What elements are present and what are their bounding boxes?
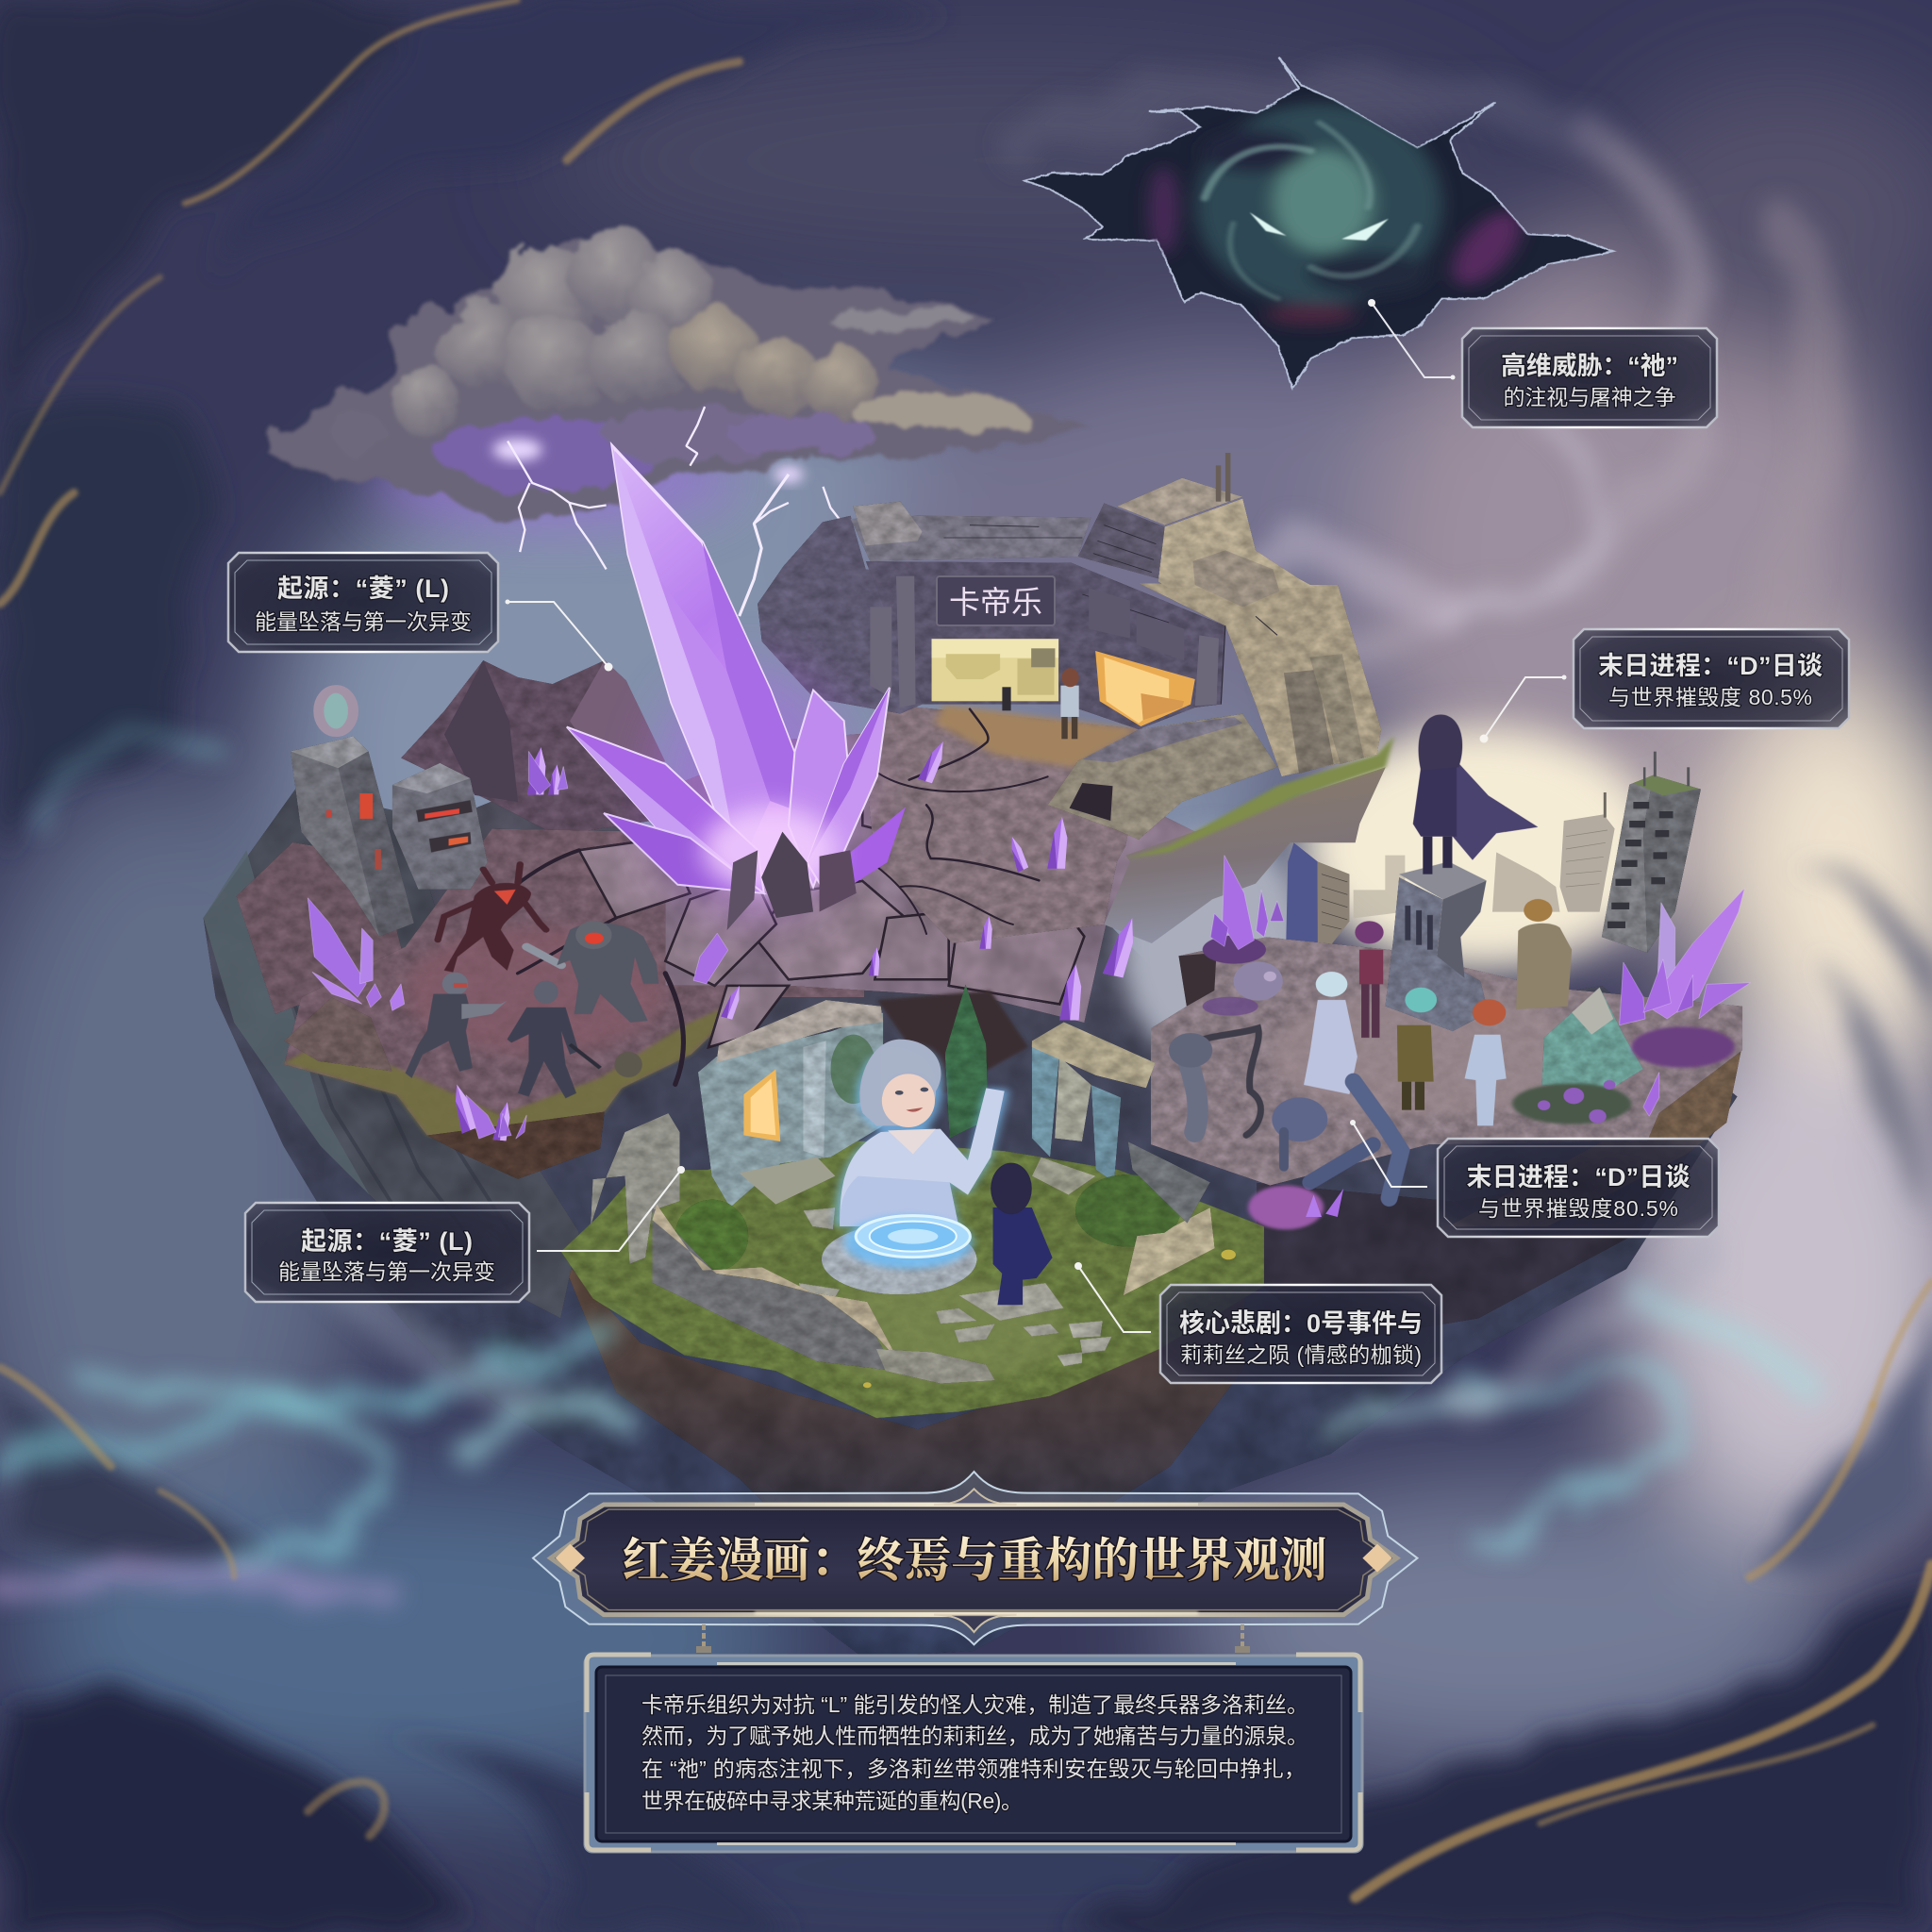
dimensional rift with eyes — [1024, 57, 1614, 389]
right mech tower — [392, 763, 488, 890]
crystal sphere — [1234, 961, 1283, 1001]
callout: doomsday progress upper: 与世界摧毁度 80.5% — [1608, 685, 1812, 709]
hologram woman — [835, 1040, 1009, 1226]
pedestal — [1385, 861, 1489, 1031]
tall crystals — [308, 751, 728, 1139]
white-dressed survivor — [1304, 1000, 1357, 1094]
dark-haired girl — [991, 1163, 1053, 1305]
callout: doomsday progress upper — [1479, 629, 1849, 743]
silver corner brackets — [587, 1655, 1360, 1850]
monster — [438, 864, 546, 972]
callout: doomsday progress lower: 末日进程：“D”日谈 — [1466, 1163, 1690, 1191]
leader line — [1074, 1262, 1151, 1332]
purple flower patches — [1203, 936, 1735, 1124]
garden island surface — [561, 1139, 1264, 1418]
storm cloud — [265, 226, 1091, 527]
callout: higher-dimensional threat: 的注视与屠神之争 — [1504, 385, 1675, 409]
leader line — [1368, 299, 1455, 379]
left mech tower — [291, 736, 414, 937]
callout: origin upper: 能量坠落与第一次异变 — [255, 609, 472, 634]
crumbled walls and bushes — [591, 1113, 1236, 1388]
bunker hill moss and cliff — [866, 705, 1394, 943]
callout: origin lower — [245, 1166, 685, 1302]
scattered purple crystals on plateau — [444, 738, 1138, 1141]
red-haired survivor — [1465, 999, 1507, 1125]
title plaque — [533, 1472, 1417, 1644]
leader line — [1479, 675, 1566, 743]
dark gap between plateau and garden — [877, 991, 1028, 1094]
description panel: 世界在破碎中寻求某种荒诞的重构(Re)。 — [641, 1789, 1023, 1813]
title plaque: 红姜漫画：终焉与重构的世界观测 — [623, 1534, 1326, 1587]
glowing doorway — [1095, 651, 1195, 726]
lit laboratory window — [932, 639, 1058, 701]
mist in front of underside — [295, 1232, 1700, 1454]
callout: doomsday progress upper: 末日进程：“D”日谈 — [1598, 652, 1823, 680]
giant energy crystal — [567, 446, 906, 930]
purple crystal flower bush — [1248, 1186, 1343, 1229]
sign plate — [937, 576, 1055, 625]
callout: core tragedy — [1074, 1262, 1441, 1383]
leader line — [537, 1166, 685, 1251]
hanging chains — [696, 1624, 1250, 1653]
callout: higher-dimensional threat: 高维威胁：“祂” — [1501, 352, 1678, 380]
left stone arch with lit doorway — [698, 1000, 883, 1208]
right island figures and crystals — [1169, 714, 1751, 1198]
maroon survivor — [1355, 921, 1384, 1038]
scientist at door — [1002, 668, 1079, 739]
callout: core tragedy: 核心悲剧：0号事件与 — [1179, 1309, 1423, 1338]
soldier one — [406, 973, 508, 1078]
callout: origin upper: 起源：“菱” (L) — [277, 575, 449, 603]
plateau surface, left: battlefield — [237, 829, 864, 1179]
floating island underside — [204, 801, 1738, 1657]
callout: doomsday progress lower — [1350, 1120, 1719, 1237]
description panel: 然而，为了赋予她人性而牺牲的莉莉丝，成为了她痛苦与力量的源泉。 — [641, 1724, 1308, 1748]
battlefield: mech towers, monster, soldiers — [291, 689, 728, 1139]
broken mecha wreck — [1169, 1028, 1401, 1198]
plateau surface, middle: cracked slabs — [492, 715, 1232, 1084]
right crystals — [1210, 856, 1751, 1116]
statue — [1516, 899, 1572, 1009]
mist gap beneath plateau — [1122, 832, 1306, 1066]
plateau cliff — [204, 789, 579, 1319]
mountains — [401, 660, 687, 836]
stone bunker: Cadilla base — [758, 453, 1381, 840]
teal-haired survivor — [1397, 988, 1437, 1110]
soldier two — [508, 981, 600, 1098]
glowing portal platform — [822, 1215, 977, 1294]
description panel: 卡帝乐组织为对抗 “L” 能引发的怪人灾难，制造了最终兵器多洛莉丝。 — [641, 1692, 1308, 1717]
cypress tree — [945, 984, 989, 1139]
sign plate: 卡帝乐 — [949, 585, 1042, 620]
callout: core tragedy: 莉莉丝之陨 (情感的枷锁) — [1180, 1342, 1422, 1367]
stone beast — [1542, 988, 1643, 1091]
ring antenna — [319, 689, 353, 733]
leader line — [1350, 1120, 1427, 1187]
callout: origin lower: 起源：“菱” (L) — [301, 1227, 473, 1256]
leader line — [506, 600, 613, 672]
armored robot — [526, 921, 658, 1023]
glow behind ruined city — [1302, 726, 1660, 972]
callout: origin upper — [228, 553, 613, 672]
callout: doomsday progress lower: 与世界摧毁度80.5% — [1478, 1196, 1678, 1221]
dropped helmet — [614, 1052, 642, 1077]
right island surface — [1151, 937, 1742, 1226]
right stone arch — [1032, 1022, 1156, 1195]
callout: higher-dimensional threat — [1368, 299, 1717, 427]
description panel: 在 “祂” 的病态注视下，多洛莉丝带领雅特利安在毁灭与轮回中挣扎， — [641, 1757, 1306, 1781]
callout: origin lower: 能量坠落与第一次异变 — [278, 1259, 495, 1284]
description panel — [585, 1655, 1362, 1852]
lightning — [508, 407, 842, 616]
hooded figure — [1413, 714, 1538, 874]
ruined city backdrop — [1286, 752, 1701, 962]
